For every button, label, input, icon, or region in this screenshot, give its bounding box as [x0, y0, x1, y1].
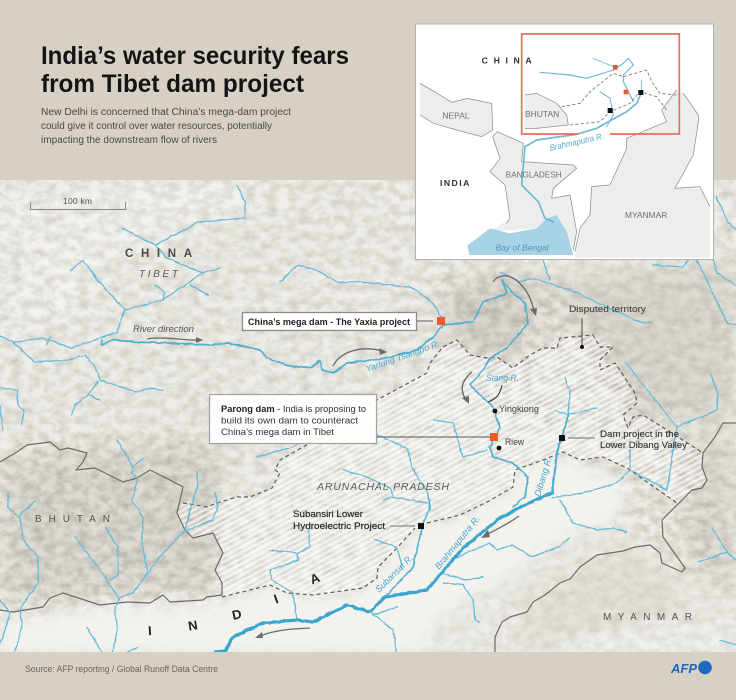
inset: labels: Bay of Bengal [495, 242, 550, 252]
title: India’s water security fears [41, 42, 349, 70]
inset: borders [420, 83, 710, 252]
inset: dam markers [608, 65, 643, 113]
source line: Source: AFP reporting / Global Runoff Data Centre [25, 664, 218, 674]
inset: labels: BANGLADESH [506, 170, 562, 180]
river labels: Subansiri R. [373, 553, 415, 594]
label: India: D [231, 606, 243, 623]
callout: Parong dam: Parong dam - India is proposing to [221, 404, 366, 414]
inset: labels: BHUTAN [525, 109, 559, 119]
marker: Dibang dam project: Dam project in the [600, 429, 679, 439]
footer band [0, 652, 736, 700]
inset: disputed line [562, 70, 677, 125]
title band [0, 0, 736, 179]
map: terrain base [0, 178, 736, 655]
intro text [41, 107, 291, 146]
inset: labels: MYANMAR [625, 210, 667, 220]
inset: labels: INDIA [440, 178, 470, 188]
disputed boundary dashed line [183, 335, 703, 597]
scale bar [30, 196, 126, 210]
flow direction arrows [147, 276, 537, 638]
marker: Yingkiong [488, 385, 539, 414]
river labels: Yarlung Tsangpo R. [364, 338, 441, 374]
AFP logo: AFP [670, 661, 697, 676]
inset: labels: CHINA [482, 55, 532, 65]
marker: Riew [497, 437, 524, 450]
inset: rivers [522, 58, 642, 222]
marker: Yingkiong: Yingkiong [499, 404, 539, 414]
inset: labels: Brahmaputra R. [549, 131, 605, 153]
intro text: could give it control over water resources, potentially [41, 121, 272, 132]
callout: Parong dam [210, 394, 498, 444]
inset: labels: NEPAL [442, 111, 470, 121]
river: Dibang [552, 415, 568, 493]
river: Subansiri [385, 493, 430, 597]
inset: Bay of Bengal [467, 215, 573, 255]
inset: labels [440, 55, 667, 252]
intro text: impacting the downstream flow of rivers [41, 135, 217, 146]
rivers [0, 185, 736, 652]
river labels: Siang R. [486, 373, 519, 383]
international borders [0, 423, 736, 652]
river: Brahmaputra [215, 493, 552, 652]
marker: Subansiri Lower Hydroelectric Project: Subansiri Lower [293, 509, 363, 519]
river: Yarlung Tsangpo / Siang main stem [102, 280, 528, 507]
marker: Dibang dam project [559, 429, 688, 450]
AFP logo [670, 661, 712, 676]
label: Myanmar: MYANMAR [603, 612, 692, 623]
label: river direction: River direction [133, 324, 194, 334]
callout: Parong dam: China’s mega dam in Tibet [221, 427, 334, 437]
river labels: Brahmaputra R. [433, 514, 482, 571]
marker: Disputed territory: Disputed territory [569, 304, 647, 314]
label: China: CHINA [125, 248, 192, 260]
scale bar: 100 km [63, 196, 92, 206]
marker: Subansiri Lower Hydroelectric Project: Hydroelectric Project [293, 521, 386, 531]
disputed territory hatching [177, 335, 707, 597]
label: India: I [148, 623, 152, 638]
callout: China's mega dam [242, 312, 445, 330]
callout: China's mega dam: China’s mega dam - The Yaxia project [248, 317, 410, 327]
label: Bhutan: BHUTAN [35, 514, 110, 525]
inset locator map [416, 24, 714, 260]
label: India: I [272, 591, 280, 607]
inset: land shapes [420, 83, 710, 258]
label: India: N [187, 617, 199, 634]
marker: Subansiri Lower Hydroelectric Project [293, 509, 424, 531]
inset: extent frame [522, 34, 679, 134]
marker: Disputed territory [569, 304, 647, 349]
label: Arunachal Pradesh: ARUNACHAL PRADESH [316, 481, 449, 493]
title [41, 42, 349, 98]
label: India [148, 570, 322, 638]
intro text: New Delhi is concerned that China’s mega-dam project [41, 107, 291, 118]
marker: Riew: Riew [505, 437, 524, 447]
marker: Dibang dam project: Lower Dibang Valley [600, 440, 688, 450]
callout: Parong dam: build its own dam to counteract [221, 416, 358, 426]
label: Tibet: TIBET [139, 269, 179, 280]
river labels [364, 338, 554, 594]
title: from Tibet dam project [41, 70, 305, 98]
map: shaded relief texture [0, 178, 736, 654]
river labels: Dibang R. [532, 455, 554, 498]
label: India: A [308, 570, 322, 587]
